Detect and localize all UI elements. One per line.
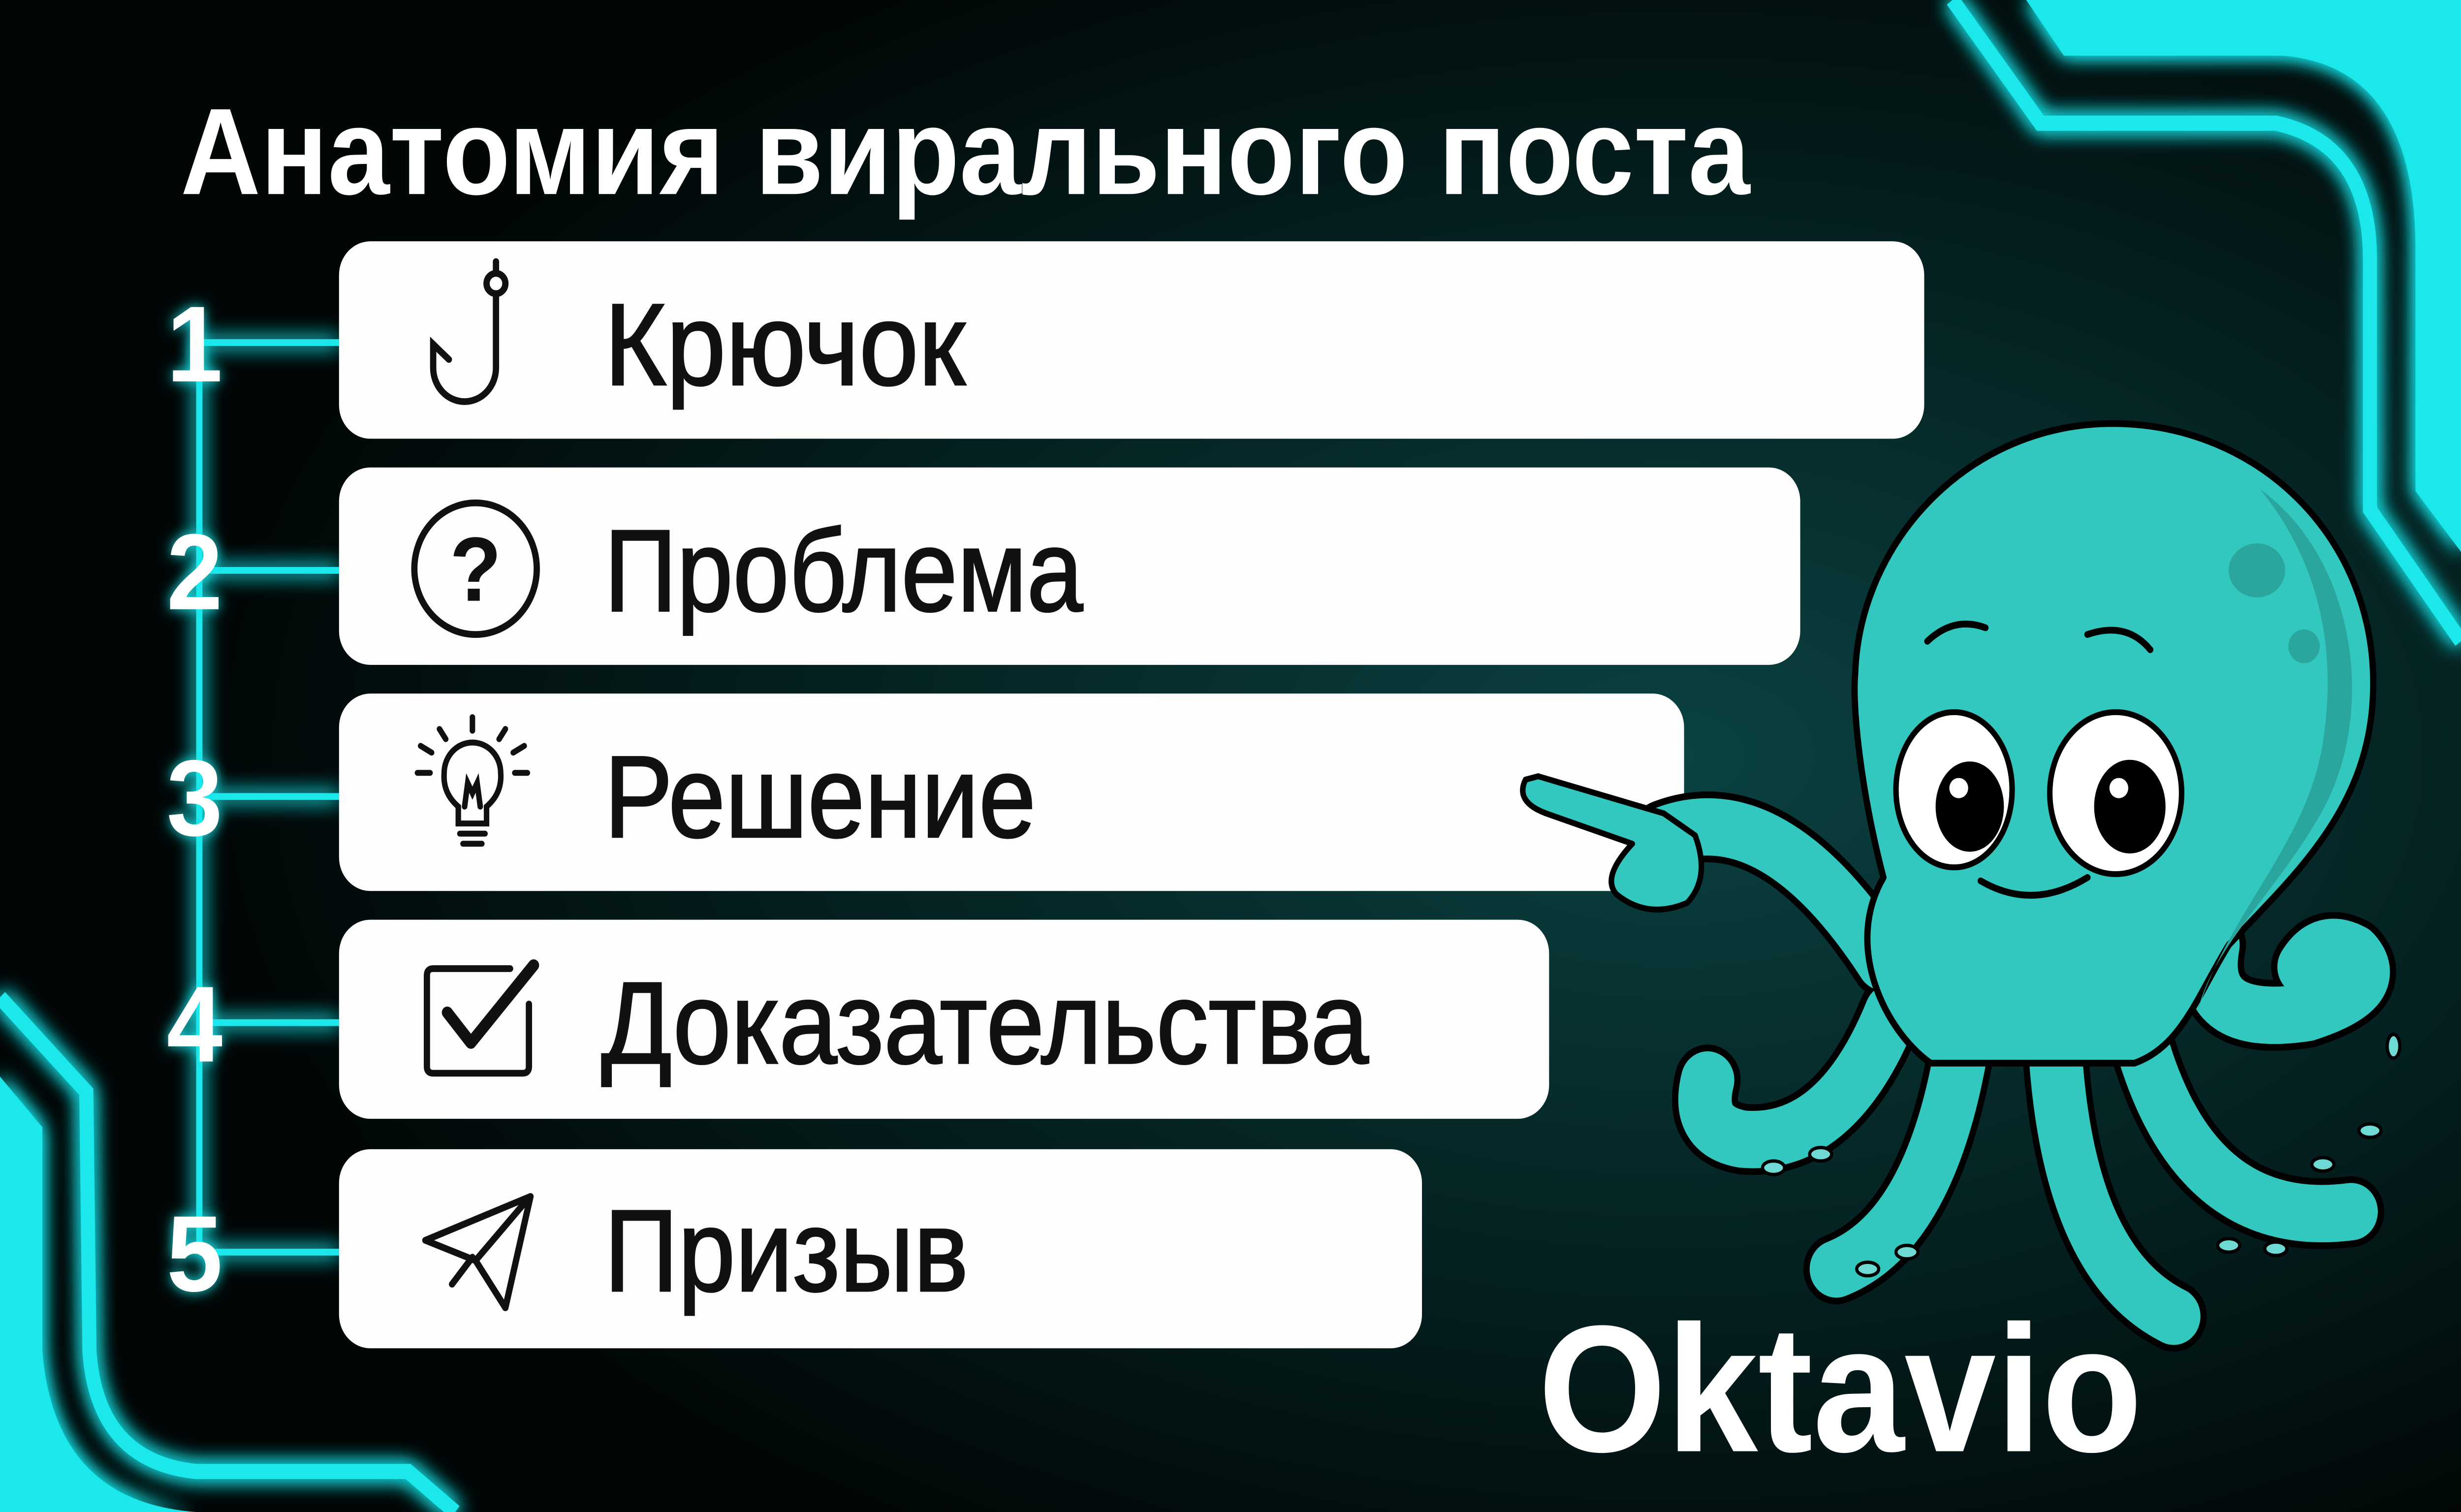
brand name: Oktavio: [1538, 1288, 2143, 1490]
icon: paper plane: [425, 1197, 531, 1308]
card 1: hook: Крючок: [604, 280, 966, 410]
suckers: [1763, 1035, 2400, 1276]
icon: fishing hook: [433, 261, 505, 402]
head and mantle: [1855, 424, 2373, 1063]
step numbers: 5: [167, 1193, 222, 1314]
step numbers: 4: [167, 964, 222, 1084]
head shading: [2197, 489, 2352, 1012]
icon: question mark: [414, 503, 537, 634]
card 4: proof: [339, 920, 1549, 1119]
hand: [1523, 776, 1702, 910]
timeline connector: [199, 343, 339, 1252]
card 1: hook: [339, 241, 1924, 439]
card 3: solution: Решение: [604, 732, 1036, 862]
eyebrows and smile: [1927, 624, 2150, 895]
icon: light bulb: [417, 717, 527, 844]
neon frame: top right: [1953, 0, 2461, 641]
neon frame: bottom left: [0, 997, 455, 1512]
step numbers: 1: [167, 284, 222, 404]
eyes: [1896, 712, 2181, 874]
spots: [2229, 543, 2285, 598]
step numbers: 3: [167, 737, 222, 858]
card 5: call to action: [339, 1149, 1422, 1348]
tentacles (outline): [1664, 827, 2363, 1316]
card 4: proof: Доказательства: [601, 958, 1369, 1088]
icon: question mark: ?: [450, 518, 502, 620]
icon: checkbox: [427, 965, 534, 1073]
octopus mascot: [1523, 424, 2400, 1316]
step numbers: 2: [167, 511, 222, 632]
card 2: problem: Проблема: [604, 506, 1083, 636]
title: Анатомия вирального поста: [181, 83, 1751, 220]
card 3: solution: [339, 693, 1684, 891]
card 5: call to action: Призыв: [604, 1186, 968, 1316]
step numbers: [167, 284, 222, 1314]
card 2: problem: [339, 468, 1800, 665]
